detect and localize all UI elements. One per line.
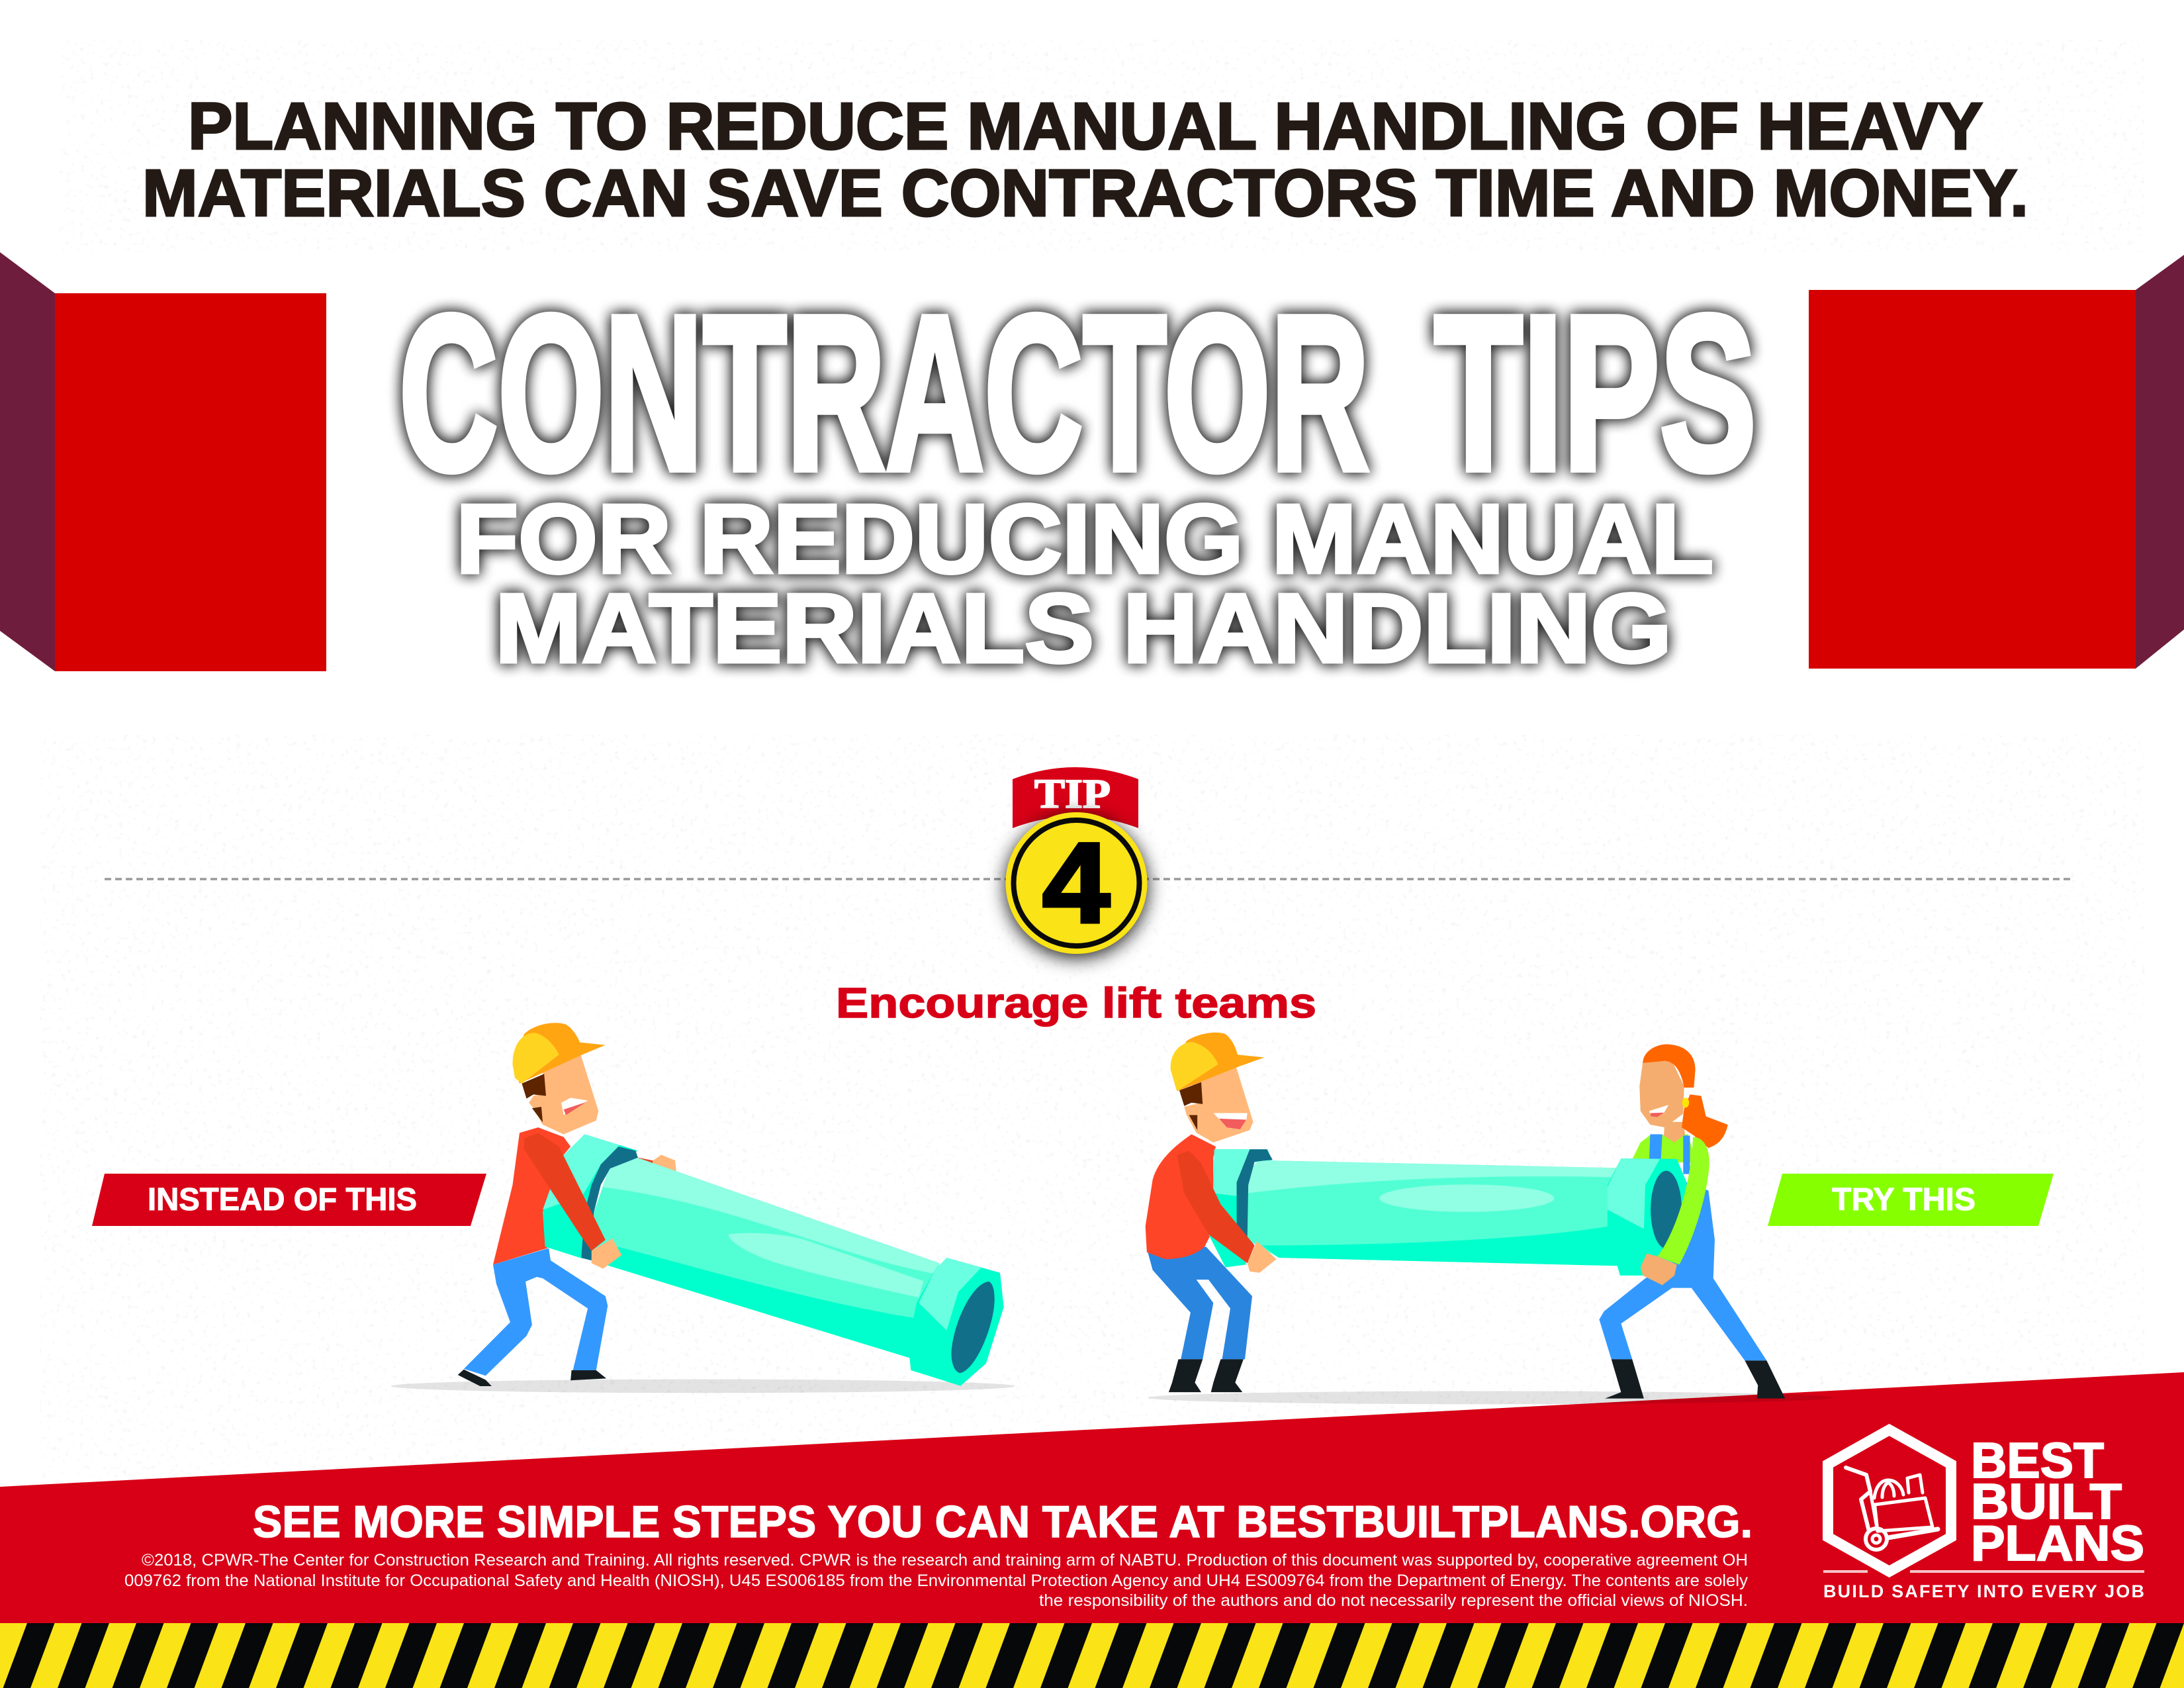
main title: CONTRACTOR — [399, 269, 1369, 516]
man legs — [1148, 1246, 1252, 1359]
woman arm and hand — [1641, 1137, 1709, 1285]
head — [522, 1052, 598, 1134]
woman hair — [1643, 1045, 1728, 1148]
label: try this: TRY THIS — [1832, 1182, 1976, 1217]
man hard hat — [1171, 1033, 1264, 1091]
logo wordmark: BUILT — [1971, 1474, 2122, 1529]
best built plans logo — [1823, 1430, 2144, 1601]
ground shadow — [391, 1380, 1015, 1393]
label: try this — [1768, 1174, 2054, 1226]
woman neck — [1664, 1122, 1685, 1143]
footer fine print: 009762 from the National Institute for Occupational Safety and Health (NIOSH), U45 ES006185 from the Environmental Protection Agency and UH4 ES009764 from the Department of Energy. The contents are solely — [124, 1571, 1749, 1590]
headline intro text: PLANNING TO REDUCE MANUAL HANDLING OF HEAVY — [188, 89, 1983, 164]
pipe — [543, 1134, 1004, 1386]
man arm and hand — [1177, 1150, 1277, 1273]
footer fine print: ©2018, CPWR-The Center for Construction Research and Training. All rights reserved. CPWR is the research and training arm of NABTU. Production of this document was supported by, cooperative agreement OH — [142, 1551, 1748, 1570]
tip 4 badge — [1006, 767, 1148, 954]
footer fine print — [124, 1551, 1749, 1610]
hard hat — [512, 1023, 606, 1084]
label: instead of this — [92, 1174, 486, 1226]
man shirt — [1146, 1134, 1216, 1259]
woman shirt and straps — [1632, 1134, 1696, 1174]
woman head — [1639, 1061, 1684, 1127]
footer red band — [0, 1372, 2184, 1624]
shirt — [493, 1127, 570, 1264]
left banner block — [0, 252, 326, 671]
illustration: single worker lifting pipe alone — [391, 1023, 1015, 1393]
pipe — [1208, 1149, 1686, 1276]
far hand — [635, 1155, 677, 1177]
shoes — [458, 1370, 606, 1386]
logo wordmark — [1971, 1432, 2144, 1571]
main title: TIPS — [1434, 269, 1756, 516]
main title — [399, 269, 1756, 683]
icon: hand truck with tools — [1846, 1468, 1938, 1550]
logo wordmark: BEST — [1971, 1432, 2104, 1488]
logo wordmark: PLANS — [1971, 1515, 2144, 1571]
footer call to action: SEE MORE SIMPLE STEPS YOU CAN TAKE AT BESTBUILTPLANS.ORG. — [253, 1497, 1752, 1547]
man head — [1179, 1064, 1253, 1143]
woman legs and overalls — [1599, 1182, 1766, 1360]
number circle: 4 — [1042, 820, 1110, 947]
legs — [464, 1248, 608, 1376]
main title: MATERIALS HANDLING — [495, 574, 1672, 683]
logo hexagon — [1828, 1430, 1951, 1571]
number circle — [1006, 812, 1148, 954]
logo tagline: BUILD SAFETY INTO EVERY JOB — [1823, 1581, 2144, 1601]
footer fine print: the responsibility of the authors and do not necessarily represent the official views of NIOSH. — [1039, 1591, 1748, 1610]
woman earring — [1682, 1098, 1689, 1107]
headline intro text: MATERIALS CAN SAVE CONTRACTORS TIME AND MONEY. — [142, 156, 2028, 230]
man boots — [1169, 1359, 1244, 1392]
right banner block — [1809, 255, 2184, 669]
tip label: TIP — [1034, 772, 1111, 817]
label: instead of this: INSTEAD OF THIS — [148, 1182, 417, 1217]
main title: FOR REDUCING MANUAL — [456, 485, 1713, 594]
ground shadow — [1148, 1391, 1832, 1404]
tip heading: Encourage lift teams — [836, 979, 1316, 1027]
hazard stripe band — [0, 1623, 2184, 1688]
headline intro text — [142, 89, 2028, 230]
illustration: two workers lifting pipe together — [1146, 1033, 1832, 1404]
woman boots — [1605, 1359, 1785, 1399]
tip ribbon — [1013, 767, 1138, 828]
arm and hand — [524, 1133, 621, 1269]
